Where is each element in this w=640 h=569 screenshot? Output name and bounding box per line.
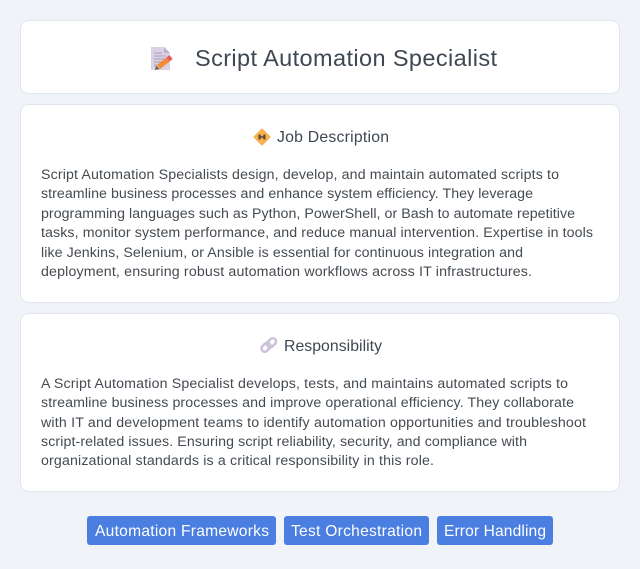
tag: automation frameworks <box>87 516 276 545</box>
title text: Script Automation Specialist <box>195 45 497 71</box>
text block: responsibility: script-related issues. Ensuring script reliability, security, and compliance with <box>41 434 527 450</box>
panel: responsibility <box>20 314 620 492</box>
panel: title <box>20 20 620 94</box>
tag: test orchestration <box>284 516 429 545</box>
heading: responsibility: Responsibility <box>284 338 382 355</box>
text block: job description: Script Automation Specialists design, develop, and maintain automated scripts to <box>41 167 559 183</box>
text block: job description: programming languages such as Python, PowerShell, or Bash to automate repetitive <box>41 206 575 222</box>
text block: responsibility: A Script Automation Specialist develops, tests, and maintains automated scripts to <box>41 376 568 392</box>
text block: job description: streamline business processes and enhance system efficiency. They leverage <box>41 186 533 202</box>
text block: responsibility: streamline business processes and improve operational efficiency. They collaborate <box>41 395 574 411</box>
text block: responsibility: with IT and development teams to identify automation opportunities and troubleshoot <box>40 415 586 431</box>
text block: responsibility: organizational standards is a critical responsibility in this role. <box>41 453 434 469</box>
text block: job description <box>41 167 593 280</box>
text block: job description: deployment, ensuring robust automation workflows across IT infrastructures. <box>41 264 532 280</box>
icon: document with pencil <box>151 47 171 70</box>
tag: test orchestration: Test Orchestration <box>291 523 422 540</box>
icon: orange diamond <box>254 130 270 144</box>
text block: job description: tasks, monitor system performance, and reduce manual intervention. Expertise in tools <box>41 225 593 241</box>
text block: job description: like Jenkins, Selenium, or Ansible is essential for continuous integration and <box>41 245 523 261</box>
tag: error handling <box>437 516 553 545</box>
text block: responsibility <box>40 376 586 469</box>
heading: job description: Job Description <box>277 129 389 146</box>
icon: chain link <box>260 337 277 353</box>
tag: error handling: Error Handling <box>444 523 546 540</box>
panel: job description <box>20 104 620 302</box>
tag: automation frameworks: Automation Frameworks <box>95 523 269 540</box>
